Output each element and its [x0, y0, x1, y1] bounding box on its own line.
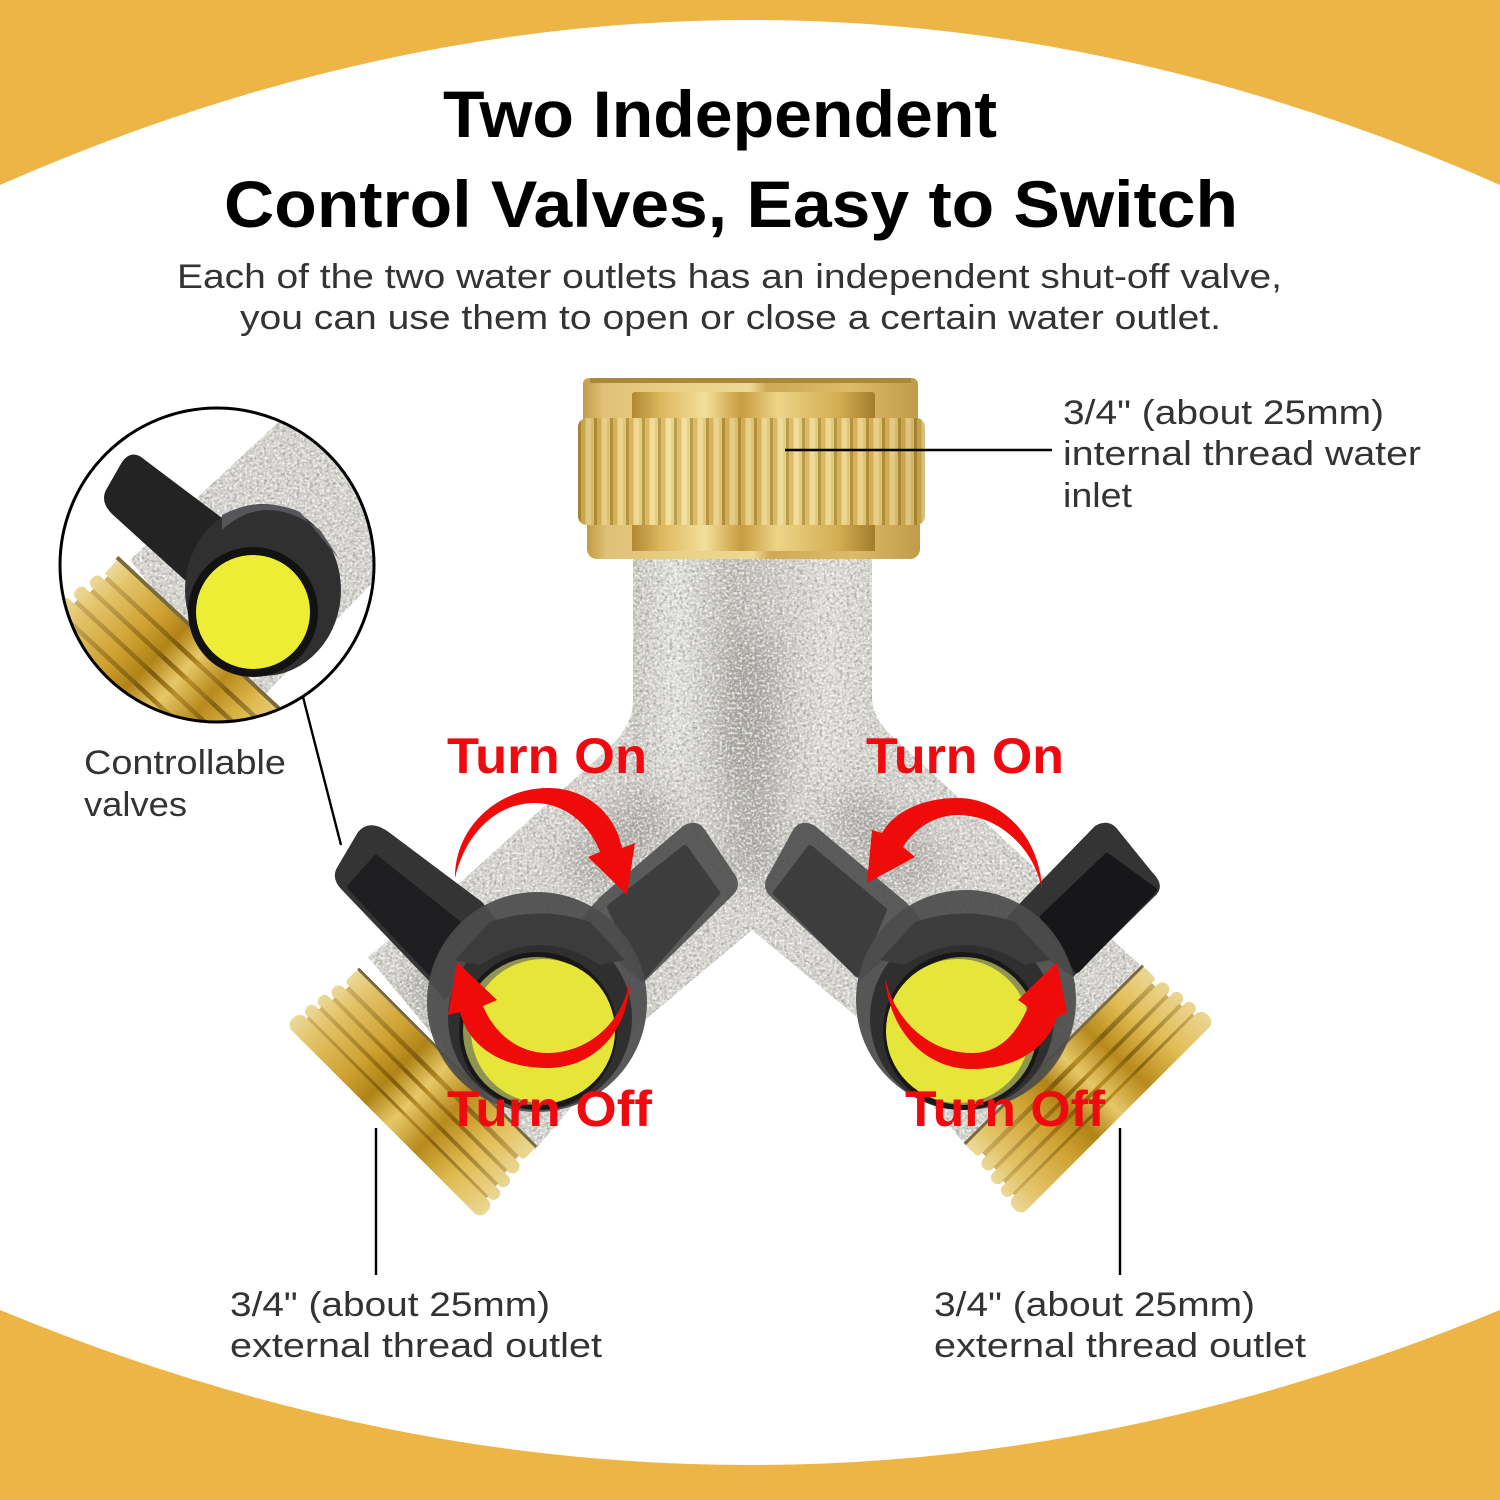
red labels: Turn Off [905, 1081, 1105, 1137]
label: inlet: internal thread water [1063, 435, 1421, 473]
label: left outlet: external thread outlet [230, 1327, 603, 1365]
label: left outlet: 3/4" (about 25mm) [230, 1286, 550, 1324]
red labels: Turn On [447, 728, 647, 784]
leader lines [303, 450, 1120, 1275]
right valve handles [765, 823, 1160, 980]
arrow: right turn off [885, 962, 1067, 1069]
product: left brass outlet [286, 960, 545, 1219]
label: inlet: 3/4" (about 25mm) [1063, 394, 1384, 432]
product: right brass outlet [956, 957, 1215, 1216]
label: left outlet [230, 1286, 603, 1365]
subtitle text [177, 258, 1282, 337]
left valve handles [335, 823, 738, 1000]
label: inlet: inlet [1063, 477, 1133, 515]
product: brass inlet coupling [578, 378, 925, 559]
red labels: Turn On [866, 728, 1064, 784]
label: right outlet: 3/4" (about 25mm) [934, 1286, 1255, 1324]
subtitle text: you can use them to open or close a certain water outlet. [240, 299, 1221, 337]
label: right outlet [934, 1286, 1307, 1365]
subtitle text: Each of the two water outlets has an independent shut-off valve, [177, 258, 1282, 296]
arrow: right turn on [867, 798, 1042, 890]
arrow: left turn on [455, 788, 635, 895]
product: Y-valve silver body [368, 556, 1140, 1150]
arrow: left turn off [448, 962, 630, 1068]
label: inlet [1063, 394, 1421, 515]
label: controllable valves [84, 744, 286, 824]
label: controllable valves: valves [84, 786, 187, 824]
title [224, 77, 1238, 241]
inset: controllable valve detail [58, 406, 376, 724]
label: controllable valves: Controllable [84, 744, 286, 782]
red labels: Turn Off [447, 1081, 652, 1137]
label: right outlet: external thread outlet [934, 1327, 1307, 1365]
right valve knob [856, 890, 1076, 1110]
red labels [447, 728, 1105, 1137]
title: Control Valves, Easy to Switch [224, 167, 1238, 241]
left valve knob [427, 892, 647, 1112]
title: Two Independent [443, 77, 997, 151]
